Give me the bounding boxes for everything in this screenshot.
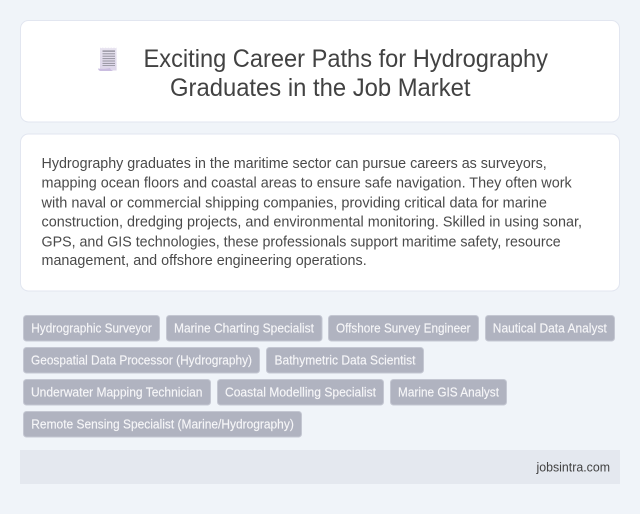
title: [144, 45, 548, 102]
description text: management, and offshore engineering operations.: [42, 252, 367, 269]
tag: Marine GIS Analyst: [390, 380, 506, 405]
tag: Bathymetric Data Scientist: [266, 348, 424, 373]
tag: Geospatial Data Processor (Hydrography): Geospatial Data Processor (Hydrography): [31, 352, 252, 367]
tag: Offshore Survey Engineer: [328, 316, 478, 341]
description text: [41, 155, 582, 269]
tag: Marine GIS Analyst: Marine GIS Analyst: [398, 384, 499, 399]
panel: title card: [20, 20, 620, 122]
tag: Hydrographic Surveyor: [24, 316, 160, 341]
tag: Remote Sensing Specialist (Marine/Hydrography): Remote Sensing Specialist (Marine/Hydrography): [31, 416, 294, 431]
tag: Geospatial Data Processor (Hydrography): [24, 348, 260, 373]
tag: Bathymetric Data Scientist: Bathymetric Data Scientist: [274, 352, 416, 367]
panel: description card: [20, 134, 620, 291]
tag: Underwater Mapping Technician: [24, 380, 210, 405]
footer bar: [20, 450, 620, 484]
description text: GPS, and GIS technologies, these professionals support maritime safety, resource: [42, 234, 561, 250]
tag: Marine Charting Specialist: [166, 316, 322, 341]
title: Exciting Career Paths for Hydrography: [144, 45, 548, 73]
description text: mapping ocean floors and coastal areas to ensure safe navigation. They often work: [42, 174, 572, 192]
icon: document scroll: [98, 48, 117, 71]
tag: Underwater Mapping Technician: Underwater Mapping Technician: [31, 384, 202, 399]
tag: Offshore Survey Engineer: Offshore Survey Engineer: [336, 320, 471, 335]
description text: Hydrography graduates in the maritime sector can pursue careers as surveyors,: [42, 155, 547, 172]
tag: Coastal Modelling Specialist: [218, 380, 384, 405]
tag: Hydrographic Surveyor: Hydrographic Surveyor: [31, 320, 152, 335]
tag: Nautical Data Analyst: Nautical Data Analyst: [493, 320, 607, 335]
panel: career tags: [24, 316, 614, 437]
title: Graduates in the Job Market: [170, 74, 471, 102]
footer source text: jobsintra.com: [536, 460, 610, 474]
tag: Coastal Modelling Specialist: Coastal Modelling Specialist: [225, 384, 376, 399]
description text: with naval or commercial shipping companies, providing critical data for marine: [41, 194, 547, 212]
tag: Nautical Data Analyst: [486, 316, 614, 341]
tag: Marine Charting Specialist: Marine Charting Specialist: [174, 320, 314, 335]
tag: Remote Sensing Specialist (Marine/Hydrography): [24, 412, 302, 437]
description text: construction, dredging projects, and environmental monitoring. Skilled in using sonar,: [42, 214, 582, 230]
